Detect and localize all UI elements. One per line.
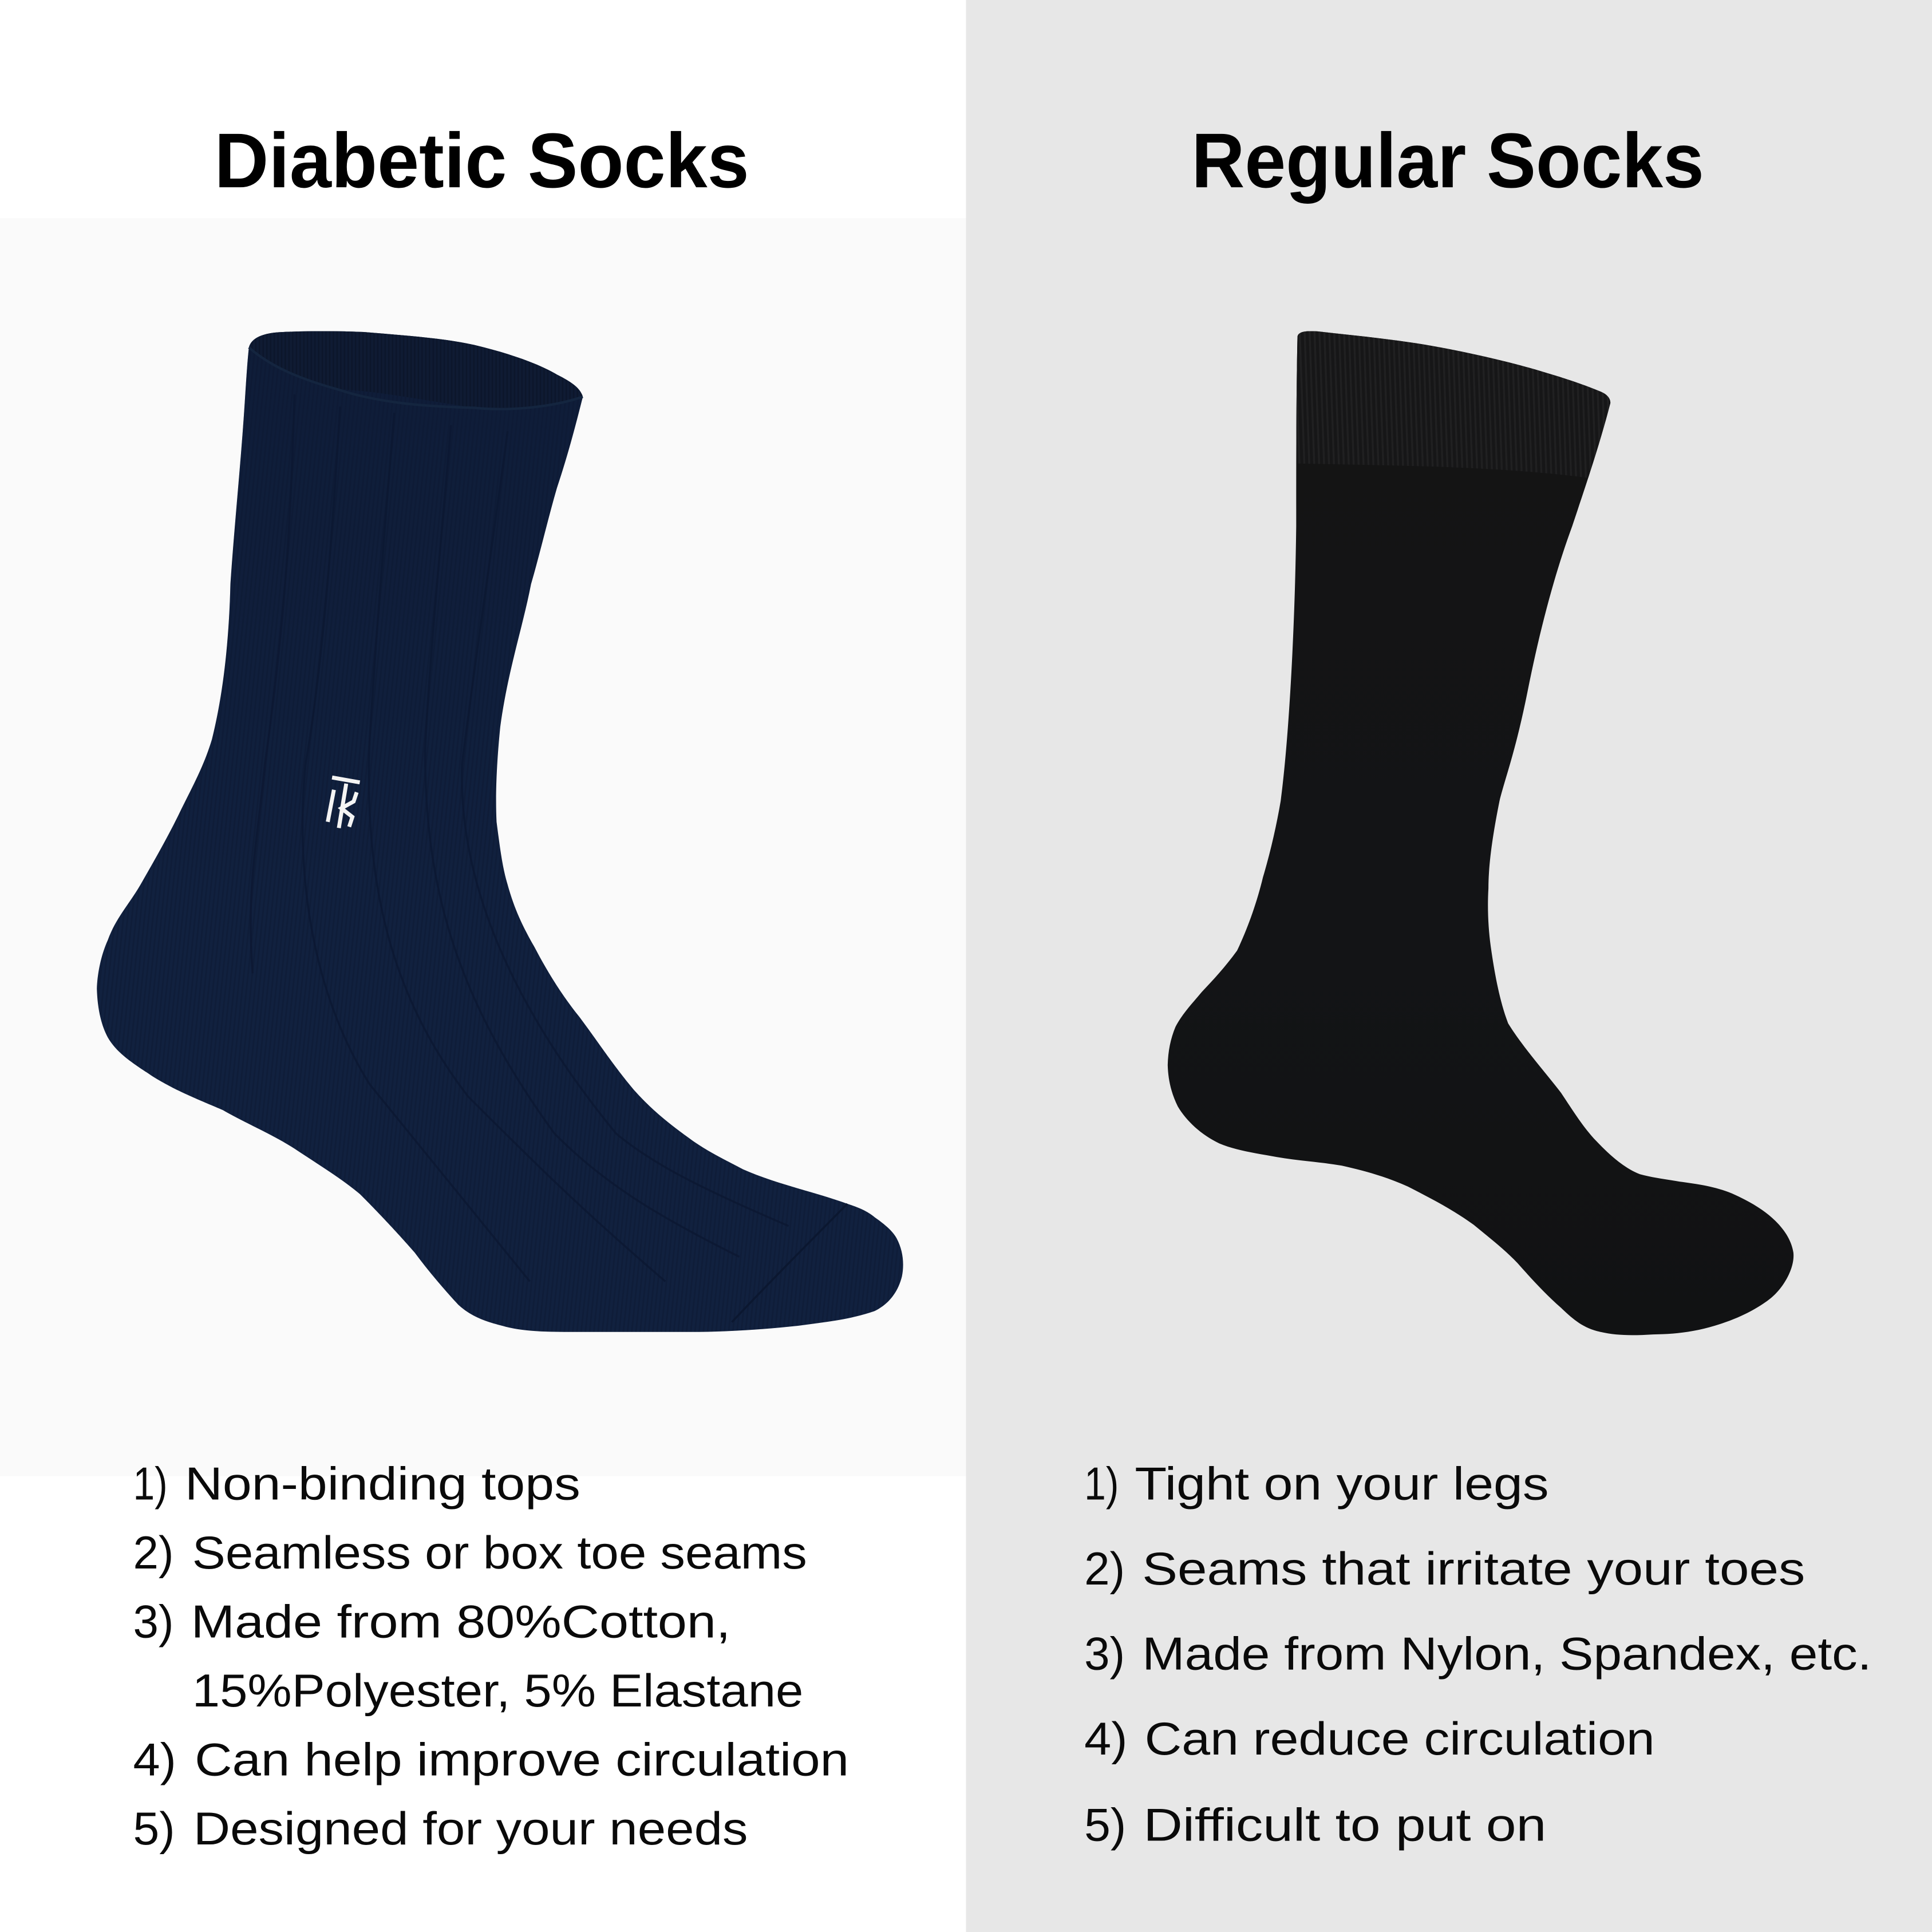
text block: diabetic socks features: Designed for your needs xyxy=(193,1803,748,1855)
text block: diabetic socks features: 15%Polyester, 5% Elastane xyxy=(192,1665,803,1717)
text block: regular socks features: Difficult to put on xyxy=(1143,1800,1546,1851)
text block: diabetic socks features: Can help improve circulation xyxy=(195,1735,849,1786)
text block: diabetic socks features: 3) xyxy=(133,1597,173,1648)
text block: regular socks features: 1) xyxy=(1084,1458,1119,1510)
panel: diabetic socks background xyxy=(0,0,966,1932)
icon: navy diabetic sock xyxy=(96,331,903,1332)
panel: diabetic sock image background xyxy=(0,218,966,1476)
text block: diabetic socks features: 1) xyxy=(133,1458,168,1510)
text block: diabetic socks features xyxy=(133,1458,849,1855)
ribbed cuff of sock xyxy=(1296,331,1611,478)
text block: diabetic socks features: Seamless or box toe seams xyxy=(192,1527,807,1579)
text block: diabetic socks features: 2) xyxy=(133,1527,173,1579)
text block: diabetic socks features: Made from 80%Cotton, xyxy=(191,1597,730,1648)
text block: regular socks features: Tight on your legs xyxy=(1135,1458,1549,1510)
text block: regular socks features: 2) xyxy=(1084,1543,1125,1595)
text block: regular socks features xyxy=(1084,1458,1872,1851)
text block: diabetic socks features: 5) xyxy=(133,1803,175,1855)
text block: regular socks features: Seams that irritate your toes xyxy=(1142,1543,1805,1595)
text block: regular socks features: Made from Nylon, Spandex, etc. xyxy=(1142,1629,1872,1680)
text block: diabetic socks features: Non-binding tops xyxy=(185,1458,580,1510)
text block: regular socks features: Can reduce circulation xyxy=(1145,1713,1655,1765)
heading: Diabetic Socks: Diabetic Socks xyxy=(215,117,749,204)
heading: Regular Socks: Regular Socks xyxy=(1191,117,1704,204)
text block: regular socks features: 3) xyxy=(1084,1629,1125,1680)
toe seam of sock xyxy=(732,1204,847,1322)
text block: regular socks features: 5) xyxy=(1084,1800,1126,1851)
text block: regular socks features: 4) xyxy=(1084,1713,1127,1765)
panel: regular socks background xyxy=(966,0,1932,1932)
icon: black regular sock xyxy=(1168,323,1793,1335)
icon: TK logo on sock xyxy=(328,777,360,828)
text block: diabetic socks features: 4) xyxy=(133,1735,176,1786)
